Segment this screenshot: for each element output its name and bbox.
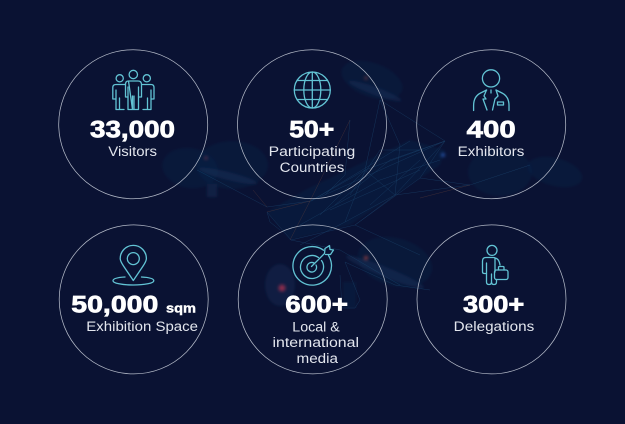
label line three: media — [296, 351, 339, 366]
drone wireframe background image — [159, 53, 586, 308]
number: 50,000 — [71, 292, 158, 319]
icon: group of people — [113, 70, 154, 110]
label: Participating — [269, 144, 355, 159]
stat: visitors — [59, 50, 208, 199]
stat: exhibitors — [417, 50, 566, 199]
number: 600+ — [285, 292, 348, 319]
number: 300+ — [463, 292, 524, 319]
label: Visitors — [108, 144, 157, 159]
stat: delegations — [417, 225, 566, 374]
unit: sqm — [166, 301, 196, 316]
label line two: Countries — [280, 160, 345, 175]
stat: participating countries — [238, 50, 386, 199]
stat: media — [238, 225, 387, 374]
label: Local & — [292, 320, 340, 334]
label: Exhibition Space — [86, 319, 198, 334]
label: Delegations — [454, 319, 535, 334]
label line two: international — [272, 335, 359, 350]
stat: exhibition space — [59, 225, 208, 374]
icon: target with arrow — [293, 246, 334, 285]
icon: globe — [294, 72, 330, 108]
icon: businessman — [474, 70, 509, 110]
icon: person with briefcase — [482, 245, 508, 284]
number: 33,000 — [90, 117, 175, 144]
number: 50+ — [289, 117, 334, 144]
label: Exhibitors — [458, 144, 525, 159]
number: 400 — [467, 117, 516, 144]
icon: map pin — [113, 245, 154, 285]
